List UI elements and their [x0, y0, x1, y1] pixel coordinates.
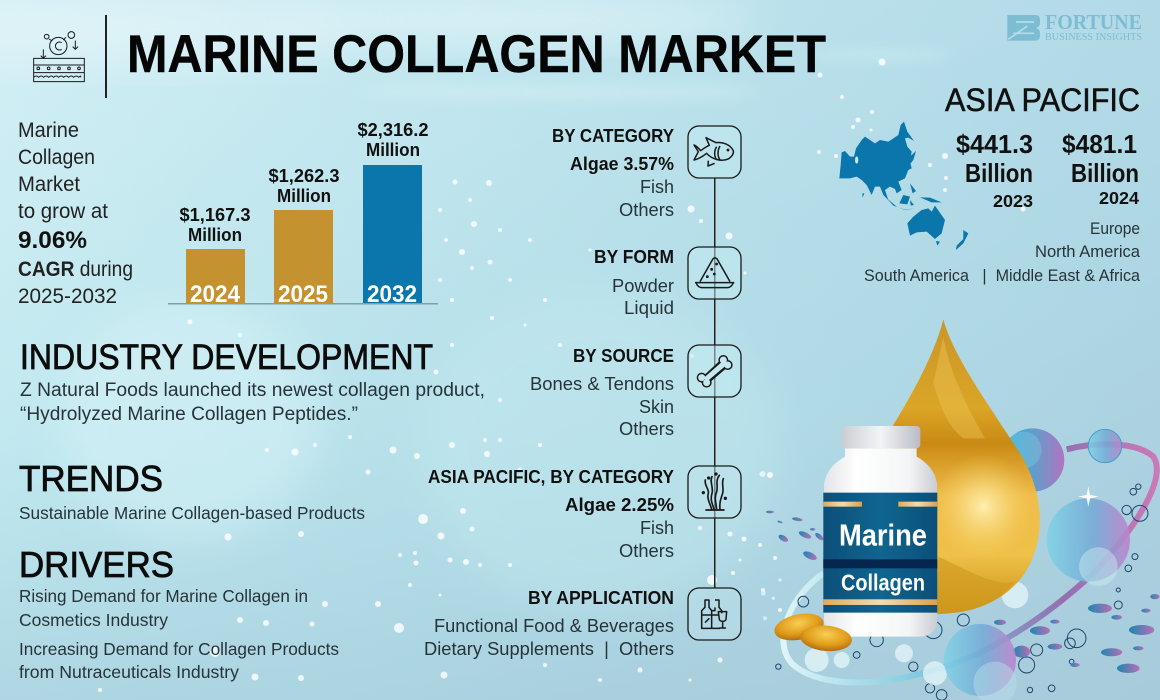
- bubble: lower: [944, 624, 1017, 700]
- segment: by source: Skin: [639, 396, 674, 417]
- segment: asia pacific by category: [428, 467, 674, 561]
- segment: by form: Powder: [612, 275, 674, 296]
- bubble: small: [1088, 429, 1122, 463]
- icon: powder: [688, 247, 741, 299]
- bar 2025: Million: [277, 186, 331, 206]
- bubble: upper: [1001, 428, 1064, 492]
- value: 2023: [956, 129, 1033, 211]
- bar chart: market size: [168, 120, 438, 308]
- segment: by category: Others: [619, 199, 674, 220]
- segment: by application: [424, 588, 674, 659]
- segment: by category: Fish: [640, 176, 674, 197]
- bar 2024: 2024: [190, 281, 241, 308]
- bottle: [823, 426, 937, 637]
- section: drivers: [19, 544, 339, 682]
- text: CAGR statement: 9.06%: [18, 227, 87, 254]
- section: industry development: INDUSTRY DEVELOPMENT: [20, 338, 433, 377]
- logo: Fortune Business Insights: BUSINESS INSIGHTS: [1045, 32, 1142, 43]
- text: CAGR statement: Marine: [18, 119, 79, 142]
- segment: by category: BY CATEGORY: [552, 126, 674, 146]
- section: industry development: Z Natural Foods launched its newest collagen product,: [20, 380, 485, 401]
- segment: by application: BY APPLICATION: [528, 588, 674, 608]
- icon: seaweed: [688, 466, 741, 518]
- bar 2032: $2,316.2: [358, 120, 428, 140]
- bottle: Collagen: [841, 570, 925, 596]
- region: Asia Pacific heading: ASIA PACIFIC: [945, 82, 1140, 118]
- oil drop: [893, 319, 1040, 614]
- section: trends: Sustainable Marine Collagen-based Products: [19, 503, 365, 523]
- bubble: large: [1047, 487, 1130, 586]
- value: 2024: Billion: [1071, 158, 1139, 188]
- bar 2032: Million: [366, 140, 420, 160]
- ribbon: [783, 444, 1157, 682]
- map: Asia Pacific: [839, 122, 968, 250]
- section: industry development: [20, 338, 485, 425]
- segment: asia pacific by category: ASIA PACIFIC, BY CATEGORY: [428, 467, 674, 487]
- value: 2023: $441.3: [956, 129, 1033, 159]
- section: drivers: Cosmetics Industry: [19, 610, 168, 630]
- segment: by application: Dietary Supplements | Others: [424, 638, 674, 659]
- other regions list: North America: [1035, 242, 1141, 261]
- bar 2025: $1,262.3: [268, 166, 340, 186]
- bar 2024: $1,167.3: [180, 205, 250, 225]
- value: 2024: 2024: [1099, 188, 1139, 208]
- small bubbles and fish: [760, 471, 1160, 700]
- text: CAGR statement: Collagen: [18, 146, 95, 169]
- segment: by source: [530, 346, 674, 439]
- section: drivers: from Nutraceuticals Industry: [19, 662, 239, 682]
- section: trends: [19, 458, 365, 523]
- icon: bottles and glass: [688, 588, 741, 640]
- value: 2024: [1062, 129, 1139, 208]
- bar 2024: Million: [188, 225, 242, 245]
- other regions list: Europe: [1090, 219, 1140, 238]
- section: drivers: DRIVERS: [19, 544, 174, 585]
- segment: by form: BY FORM: [594, 247, 674, 267]
- icon: fish: [688, 126, 741, 178]
- value: 2023: 2023: [993, 191, 1033, 211]
- icon: collagen skin layers: [34, 32, 84, 82]
- section: drivers: Rising Demand for Marine Collagen in: [19, 586, 308, 606]
- bar 2025: [268, 166, 340, 308]
- bar 2025: 2025: [278, 281, 328, 308]
- segment: by application: Functional Food & Beverages: [434, 615, 674, 636]
- other regions list: South America | Middle East & Africa: [864, 266, 1141, 285]
- bar 2032: [358, 120, 428, 308]
- other regions list: [864, 219, 1141, 285]
- value: 2024: $481.1: [1062, 129, 1137, 159]
- text: CAGR statement: Market: [18, 173, 80, 196]
- section: drivers: Increasing Demand for Collagen Products: [19, 639, 339, 659]
- section: trends: TRENDS: [19, 458, 163, 499]
- section: industry development: “Hydrolyzed Marine Collagen Peptides.”: [20, 404, 358, 425]
- logo: Fortune Business Insights: [1007, 10, 1142, 43]
- logo: Fortune Business Insights: FORTUNE: [1045, 10, 1142, 34]
- segment: asia pacific by category: Others: [619, 540, 674, 561]
- value: 2023: Billion: [965, 158, 1033, 188]
- text: CAGR statement: to grow at: [18, 200, 108, 223]
- segment: asia pacific by category: Fish: [640, 517, 674, 538]
- title: MARINE COLLAGEN MARKET: [127, 25, 826, 84]
- segment: asia pacific by category: Algae 2.25%: [565, 495, 674, 515]
- text: CAGR statement: [18, 119, 133, 308]
- segment: by source: BY SOURCE: [573, 346, 674, 366]
- illustration: bottle, oil drop and bubbles: [760, 319, 1160, 700]
- segment: by form: [594, 247, 674, 318]
- title divider: [105, 15, 107, 98]
- icon: bone: [688, 345, 741, 397]
- segment: by source: Others: [619, 418, 674, 439]
- bar 2032: 2032: [367, 281, 417, 308]
- bar 2024: [180, 205, 250, 308]
- segment: by category: [552, 126, 674, 220]
- text: CAGR statement: 2025-2032: [18, 285, 117, 308]
- segment: by form: Liquid: [624, 297, 674, 318]
- softgel capsules: [772, 609, 853, 653]
- connector line: [714, 178, 716, 588]
- segment: by source: Bones & Tendons: [530, 373, 674, 394]
- text: CAGR statement: CAGR during: [18, 258, 133, 281]
- segment: by category: Algae 3.57%: [570, 154, 674, 174]
- bottle: Marine: [839, 518, 927, 552]
